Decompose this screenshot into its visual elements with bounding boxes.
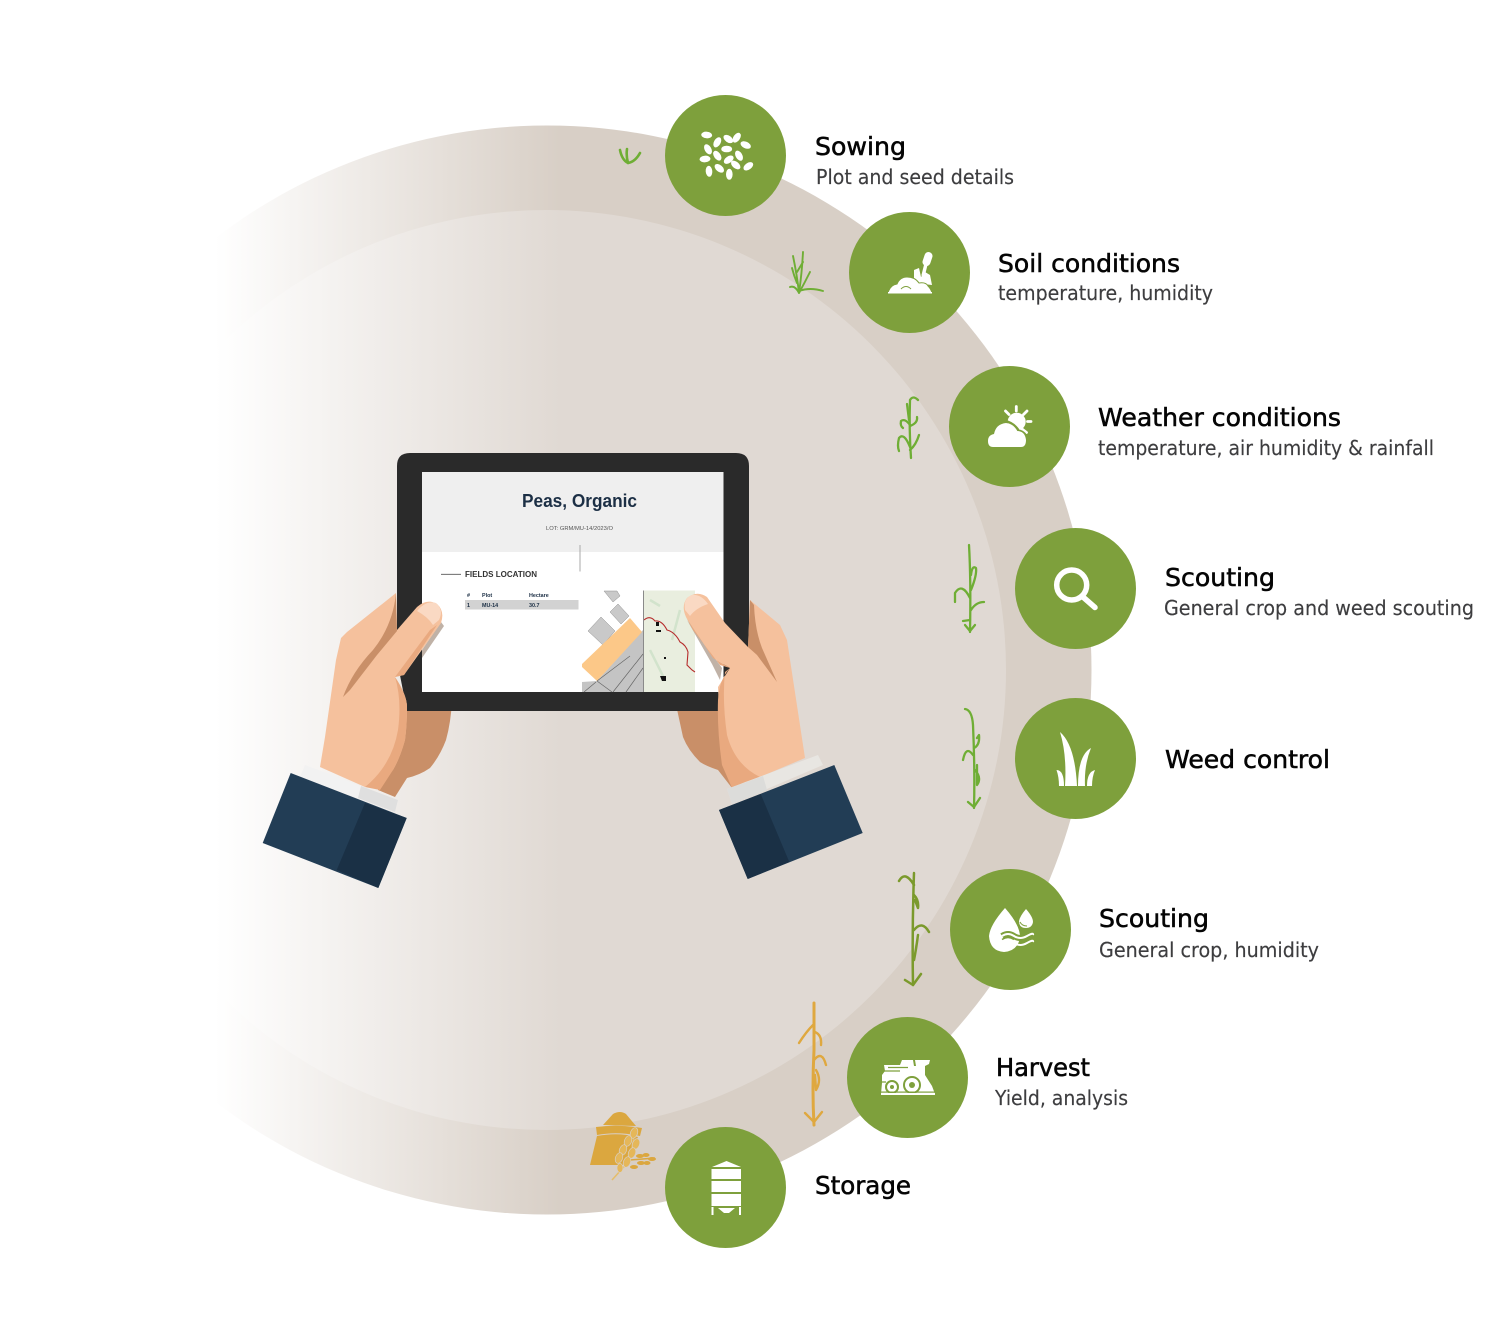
right sleeve <box>719 765 863 879</box>
right fingers behind tablet <box>675 700 745 788</box>
lot number: LOT: GRM/MU-14/2023/O <box>546 526 614 532</box>
description: harvest: Yield, analysis <box>994 1086 1128 1110</box>
icon: seeds <box>665 95 786 216</box>
report title: Peas, Organic <box>522 491 637 511</box>
plant: seedling <box>790 252 823 293</box>
plant: growing stalk <box>955 545 984 632</box>
heading: harvest: Harvest <box>996 1053 1090 1082</box>
plot table: 30.7 <box>529 603 540 609</box>
plot table: 1 <box>467 603 470 609</box>
step: storage <box>665 1127 911 1248</box>
left fingers behind tablet <box>378 700 452 797</box>
step: soil conditions <box>849 212 1213 333</box>
step: scouting general crop and weed <box>1015 528 1474 649</box>
icon: weed blades <box>1015 698 1136 819</box>
right shirt cuff <box>727 755 823 804</box>
plant: mature stalk <box>899 873 929 985</box>
step: weed control <box>1015 698 1330 819</box>
heading: scouting: Scouting <box>1165 563 1275 592</box>
icon: soil and trowel <box>849 212 970 333</box>
right thumbnail <box>685 595 708 616</box>
plot table: Hectare <box>529 593 549 599</box>
icon: sun and cloud <box>949 366 1070 487</box>
background circles <box>2 126 1092 1214</box>
tablet body <box>397 453 749 711</box>
plot table: MU-14 <box>482 603 498 609</box>
plant: tall stalk <box>963 709 980 808</box>
step: harvest <box>847 1017 1128 1138</box>
plant: sprout <box>620 149 640 163</box>
right palm and thumb <box>684 594 805 788</box>
location map <box>643 590 695 692</box>
description: general crop, humidity: General crop, humidity <box>1099 938 1319 962</box>
tablet screen <box>422 472 724 692</box>
heading: sowing: Sowing <box>815 132 906 161</box>
left shirt cuff <box>300 765 398 812</box>
plot table: Plot <box>482 593 492 599</box>
plot map <box>582 590 643 692</box>
heading: soil conditions: Soil conditions <box>998 249 1180 278</box>
heading: weed control: Weed control <box>1165 745 1330 774</box>
icon: combine harvester <box>847 1017 968 1138</box>
step: weather conditions <box>949 366 1434 487</box>
description: soil conditions: temperature, humidity <box>998 281 1213 305</box>
thumb shadows <box>422 620 722 680</box>
fields location heading: FIELDS LOCATION <box>465 570 537 579</box>
step: scouting humidity <box>950 869 1319 990</box>
left thumbnail <box>417 602 441 625</box>
plot table <box>465 593 578 610</box>
heading: weather conditions: Weather conditions <box>1098 403 1341 432</box>
left sleeve <box>263 773 407 888</box>
icon: grain sack <box>590 1112 656 1180</box>
plot table: # <box>467 593 470 599</box>
description: weather conditions: temperature, air humidity & rainfall <box>1098 436 1434 460</box>
description: sowing: Plot and seed details <box>816 165 1014 189</box>
plant: young shoot <box>898 398 919 458</box>
heading: storage: Storage <box>815 1171 911 1200</box>
description: scouting: General crop and weed scouting <box>1164 596 1474 620</box>
icon: grain silo <box>665 1127 786 1248</box>
heading: scouting: Scouting <box>1099 904 1209 933</box>
icon: magnifying glass <box>1015 528 1136 649</box>
step: sowing <box>665 95 1014 216</box>
icon: water drops <box>950 869 1071 990</box>
illustration: hands holding tablet <box>263 453 863 888</box>
plant: ripe golden stalk <box>799 1003 826 1125</box>
left palm and thumb <box>320 593 442 790</box>
